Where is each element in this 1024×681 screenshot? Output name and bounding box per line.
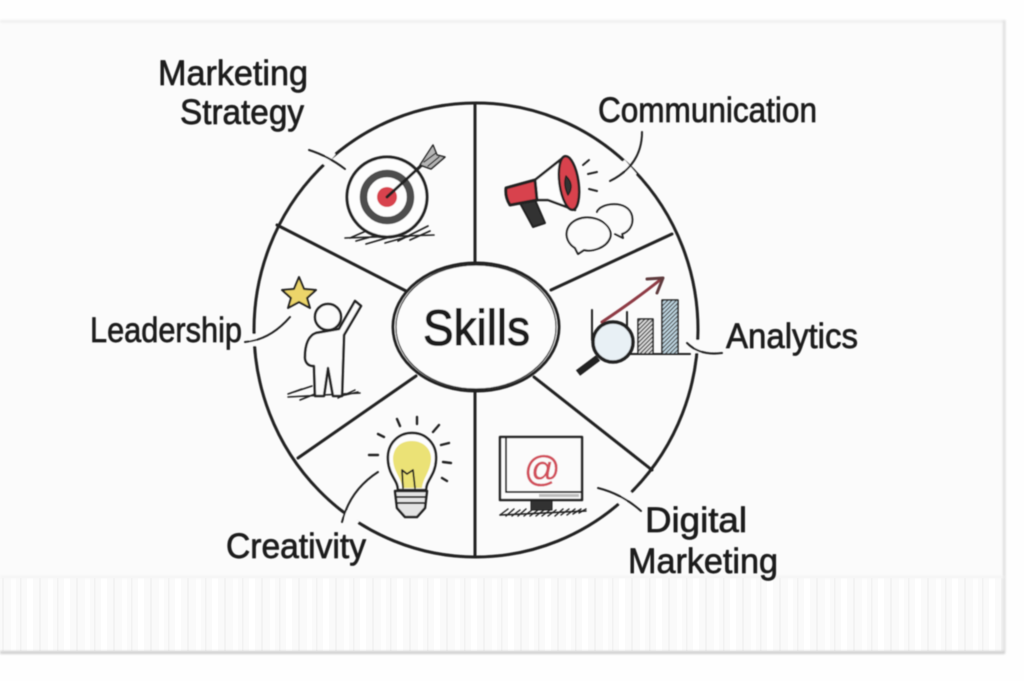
leader line gaps <box>253 152 698 524</box>
label: Analytics: Analytics <box>726 317 858 356</box>
label: Digital Marketing: Marketing <box>628 542 778 581</box>
centre label: Skills <box>423 300 530 356</box>
icon: computer with at sign: @ <box>524 448 561 489</box>
skills wheel <box>254 103 698 557</box>
hand-drawn content <box>90 54 858 581</box>
label: Digital Marketing <box>598 488 778 581</box>
label: Marketing Strategy: Marketing <box>158 54 308 93</box>
label: Creativity <box>226 472 378 566</box>
label: Leadership: Leadership <box>90 311 242 350</box>
icon: megaphone <box>506 155 632 254</box>
outer circle <box>254 103 698 557</box>
centre ellipse <box>393 263 559 391</box>
label: Communication: Communication <box>598 91 817 130</box>
icon: computer with at sign <box>500 437 586 516</box>
icon: light bulb <box>369 417 451 517</box>
label: Marketing Strategy <box>158 54 345 169</box>
label: Creativity: Creativity <box>226 527 366 566</box>
label: Communication <box>598 91 817 181</box>
icon: star and person <box>282 277 361 400</box>
icon: analytics chart with magnifier <box>578 278 690 373</box>
label: Marketing Strategy: Strategy <box>180 93 304 132</box>
label: Digital Marketing: Digital <box>645 501 747 540</box>
icon: target with arrow <box>345 145 445 244</box>
wheel spokes <box>277 104 672 556</box>
